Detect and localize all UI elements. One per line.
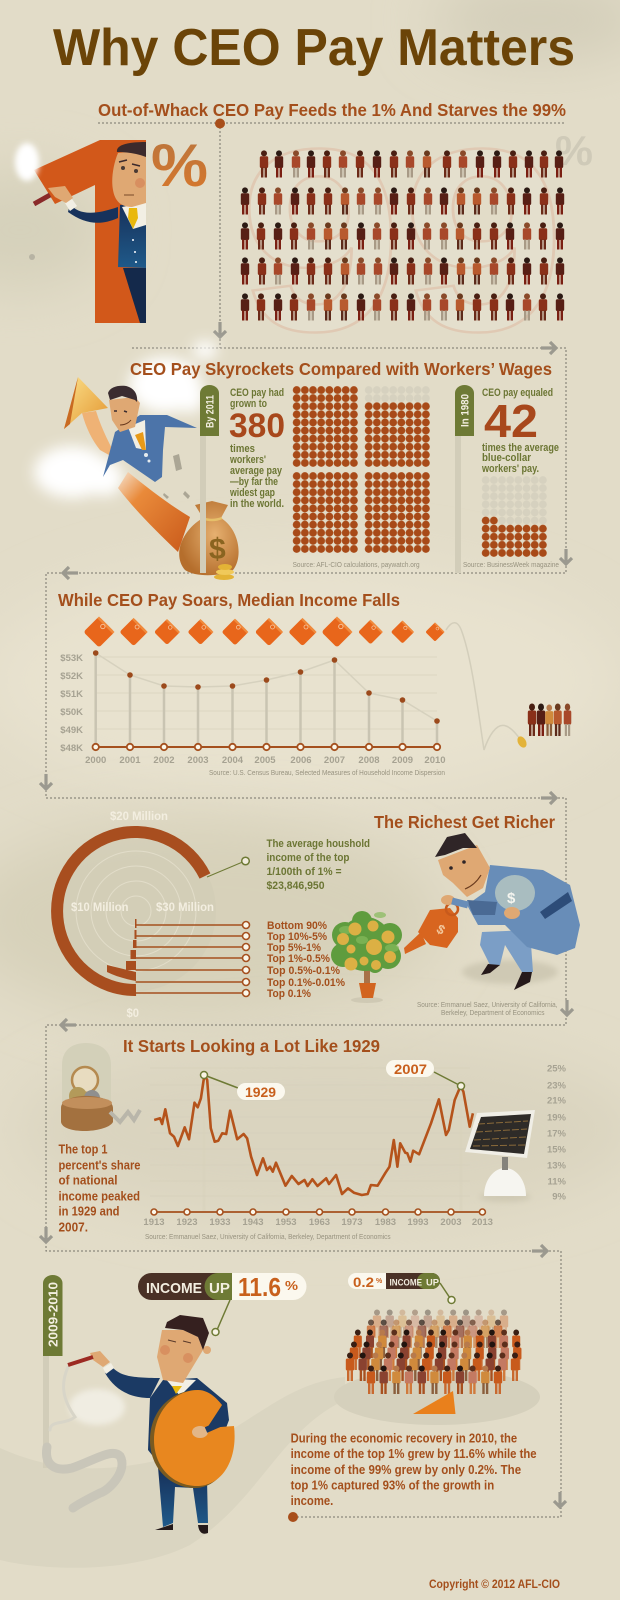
icon: small pie slice <box>413 1391 456 1414</box>
line chart: median income: $52K <box>60 671 83 682</box>
line chart: income share: 2013 <box>472 1217 493 1228</box>
text block: 2011: in the world. <box>230 498 284 510</box>
legend: income groups: Top 1%-0.5% <box>267 953 330 965</box>
line chart: income share: 19% <box>547 1112 567 1124</box>
line chart: median income: 2006 <box>290 755 312 766</box>
line chart: median income: 2002 <box>153 755 175 766</box>
line chart: income share: 1993 <box>407 1217 429 1228</box>
percent sign 1: % <box>151 132 208 199</box>
line chart: income share: 1913 <box>143 1217 165 1228</box>
heading: While CEO Pay Soars, Median Income Falls <box>58 590 400 610</box>
line chart: income share: 2003 <box>440 1217 462 1228</box>
callout: income up 0.2%: INCOME <box>390 1278 422 1288</box>
people rows <box>241 150 564 320</box>
line chart: income share: 1973 <box>341 1217 363 1228</box>
text block: percent's share <box>58 1158 140 1172</box>
percent sign 99: % <box>555 127 593 174</box>
line chart: income share: 11% <box>548 1176 567 1188</box>
big number 99: 99 <box>239 96 565 386</box>
text block: 2011: CEO pay had <box>230 387 284 399</box>
icon: money bag <box>179 501 239 580</box>
line chart: income share: 9% <box>552 1192 567 1202</box>
text block: 2011: times <box>230 443 255 455</box>
tab: by 2011 <box>200 385 219 573</box>
icon: computer <box>465 1110 535 1202</box>
icon: group of workers <box>528 703 571 736</box>
big number 1 <box>34 140 146 323</box>
line chart: income share: 25% <box>547 1064 567 1074</box>
tab: 2009-2010 <box>43 1275 62 1468</box>
text block: income. <box>291 1493 333 1508</box>
tab: 2009-2010: 2009-2010 <box>46 1282 60 1347</box>
line chart: median income: $51K <box>60 689 83 700</box>
callout: top income: income of the top <box>266 852 350 864</box>
line chart: median income: $50K <box>60 707 83 718</box>
radial bar chart: $0 <box>126 1006 139 1020</box>
text block: 2011: widest gap <box>229 487 275 499</box>
callout: income up 11.6%: UP <box>209 1280 230 1297</box>
callout: income up 11.6%: % <box>285 1278 298 1293</box>
panel: median income falls <box>58 590 571 777</box>
icon: money bag: $ <box>209 533 226 566</box>
line chart: income share: 1933 <box>209 1217 231 1228</box>
line chart: income share: 1943 <box>242 1217 264 1228</box>
icon: CEO with pie <box>68 1315 235 1534</box>
title: Why CEO Pay Matters <box>53 19 575 77</box>
text block: of national <box>58 1172 118 1188</box>
text block: 2011: workers' <box>229 454 266 466</box>
icon row: shrinking wallets <box>83 616 445 648</box>
icon: CEO watering <box>435 833 580 990</box>
line chart: income share: 13% <box>547 1160 567 1172</box>
text block: 2011: —by far the <box>230 476 278 488</box>
callout: income up 0.2%: UP <box>426 1278 439 1288</box>
text block: 2007. <box>58 1220 88 1234</box>
line chart: income share: 1929 <box>245 1084 276 1100</box>
line chart: median income: $53K <box>60 653 83 664</box>
source: Source: AFL-CIO calculations, paywatch.org <box>293 562 420 569</box>
line chart: income share: 23% <box>547 1080 567 1092</box>
line chart: median income: $48K <box>60 743 83 754</box>
legend: income groups: Top 0.1% <box>267 988 311 1000</box>
line chart: income share: 15% <box>547 1144 567 1156</box>
dot grid: 42 <box>482 476 547 557</box>
callout: income up 0.2% <box>348 1273 455 1304</box>
line chart: income share: 2007 <box>394 1061 427 1077</box>
line chart: income share: 17% <box>547 1128 567 1140</box>
illustration: clouds <box>34 341 217 498</box>
icon: stock ticker under glass <box>61 1043 140 1131</box>
line chart: median income: 2005 <box>254 755 276 766</box>
icon: watering can: $ <box>434 921 448 938</box>
panel: the richest get richer <box>56 809 580 1020</box>
tab: in 1980: In 1980 <box>460 394 472 427</box>
text block: income of the 99% grew by only 0.2%. The <box>291 1462 521 1477</box>
radial bar chart: $20 Million <box>110 809 168 823</box>
text block: income of the top 1% grew by 11.6% while the <box>291 1446 537 1461</box>
heading: CEO Pay Skyrockets Compared with Workers’ Wages <box>130 359 552 379</box>
icon: rising arrow <box>64 377 190 552</box>
text block: 1980: times the average <box>482 442 559 454</box>
line chart: median income: 2010 <box>424 755 446 766</box>
heading: It Starts Looking a Lot Like 1929 <box>123 1036 380 1056</box>
bouncing coin path <box>446 623 528 750</box>
line chart: median income: 2009 <box>392 755 413 766</box>
line chart: income share: 1923 <box>176 1217 198 1228</box>
source: Source: U.S. Census Bureau, Selected Measures of Household Income Dispersion <box>209 770 445 777</box>
callout: income up 11.6%: INCOME <box>146 1280 202 1297</box>
smoke <box>47 1367 125 1508</box>
callout: income up 0.2%: % <box>376 1278 383 1285</box>
copyright: Copyright © 2012 AFL-CIO <box>429 1577 560 1591</box>
legend: income groups: Bottom 90% <box>267 920 327 932</box>
radial bar chart: $10 Million <box>71 900 128 914</box>
source: Source: Emmanuel Saez, University of California, <box>417 1002 558 1009</box>
line chart: income share: 1963 <box>309 1217 330 1228</box>
source: Source: BusinessWeek magazine <box>463 562 559 569</box>
text block: in 1929 and <box>58 1204 120 1218</box>
callout: income up 11.6%: 11.6 <box>238 1272 281 1302</box>
panel: 2009-2010 recovery <box>43 1272 560 1591</box>
panel: looks like 1929 <box>58 1036 567 1241</box>
heading: Out-of-Whack CEO Pay Feeds the 1% And Starves the 99% <box>98 100 566 120</box>
text block: 2011: grown to <box>230 398 267 410</box>
legend: income groups: Top 5%-1% <box>267 942 321 954</box>
source <box>417 1002 558 1017</box>
section path dashes and arrows <box>40 118 573 1522</box>
callout: top income <box>266 838 370 892</box>
text block <box>291 1430 537 1508</box>
line chart: median income: 2000 <box>85 755 106 766</box>
legend: income groups: Top 0.1%-0.01% <box>267 977 345 989</box>
line chart: income share <box>143 1060 567 1228</box>
line chart: median income: 2008 <box>358 755 380 766</box>
text block: income peaked <box>58 1188 140 1204</box>
icon: CEO behind the 1 <box>15 142 146 323</box>
line chart: income share: 21% <box>547 1096 567 1106</box>
text block: 1980: workers' pay. <box>481 463 539 475</box>
text block: 2011: average pay <box>230 465 283 477</box>
text block: 1980: CEO pay equaled <box>482 387 553 399</box>
legend: income groups: Top 10%-5% <box>267 931 327 943</box>
heading: The Richest Get Richer <box>374 812 555 832</box>
panel: 1 percent vs 99 percent <box>12 103 592 334</box>
line chart: median income: 2004 <box>222 755 244 766</box>
text block: During the economic recovery in 2010, the <box>291 1430 517 1446</box>
panel: CEO pay skyrockets <box>34 341 559 580</box>
text block: 1980: blue-collar <box>482 452 532 464</box>
source: Source: Emmanuel Saez, University of California, Berkeley, Department of Economics <box>145 1234 391 1241</box>
legend: income groups <box>267 920 345 1000</box>
line chart: median income: 2003 <box>187 755 209 766</box>
text block: top 1% captured 93% of the growth in <box>291 1478 494 1492</box>
line chart: income share: 1953 <box>275 1217 297 1228</box>
text block <box>58 1142 140 1234</box>
callout: income up 11.6% <box>138 1272 306 1336</box>
line chart: income share: 1983 <box>375 1217 396 1228</box>
icon: CEO watering: $ <box>507 890 516 907</box>
icon: watering can <box>404 903 458 954</box>
dot grid: 380 <box>293 386 430 553</box>
radial bar chart <box>56 809 250 1020</box>
text block: 2011: 380 <box>229 407 285 445</box>
radial bar chart: $30 Million <box>156 900 214 914</box>
callout: top income: $23,846,950 <box>266 880 324 892</box>
callout: income up 0.2%: 0.2 <box>353 1275 374 1290</box>
legend: income groups: Top 0.5%-0.1% <box>267 965 340 977</box>
text block: The top 1 <box>58 1142 108 1156</box>
tab: by 2011: By 2011 <box>204 395 216 428</box>
icon: flying CEO <box>103 386 197 499</box>
icon: money tree <box>331 911 402 1003</box>
line chart: median income: $49K <box>60 725 83 736</box>
line chart: median income <box>60 650 446 766</box>
text block: 2011 <box>229 387 285 510</box>
callout: top income: 1/100th of 1% = <box>266 866 342 878</box>
text block: 1980 <box>481 387 559 475</box>
line chart: median income: 2001 <box>119 755 141 766</box>
text block: 1980: 42 <box>484 395 538 447</box>
callout: top income: The average houshold <box>266 838 370 850</box>
icon: crowd of workers <box>346 1310 521 1394</box>
line chart: median income: 2007 <box>324 755 345 766</box>
source: Berkeley, Department of Economics <box>441 1010 545 1017</box>
tab: in 1980 <box>455 385 474 573</box>
